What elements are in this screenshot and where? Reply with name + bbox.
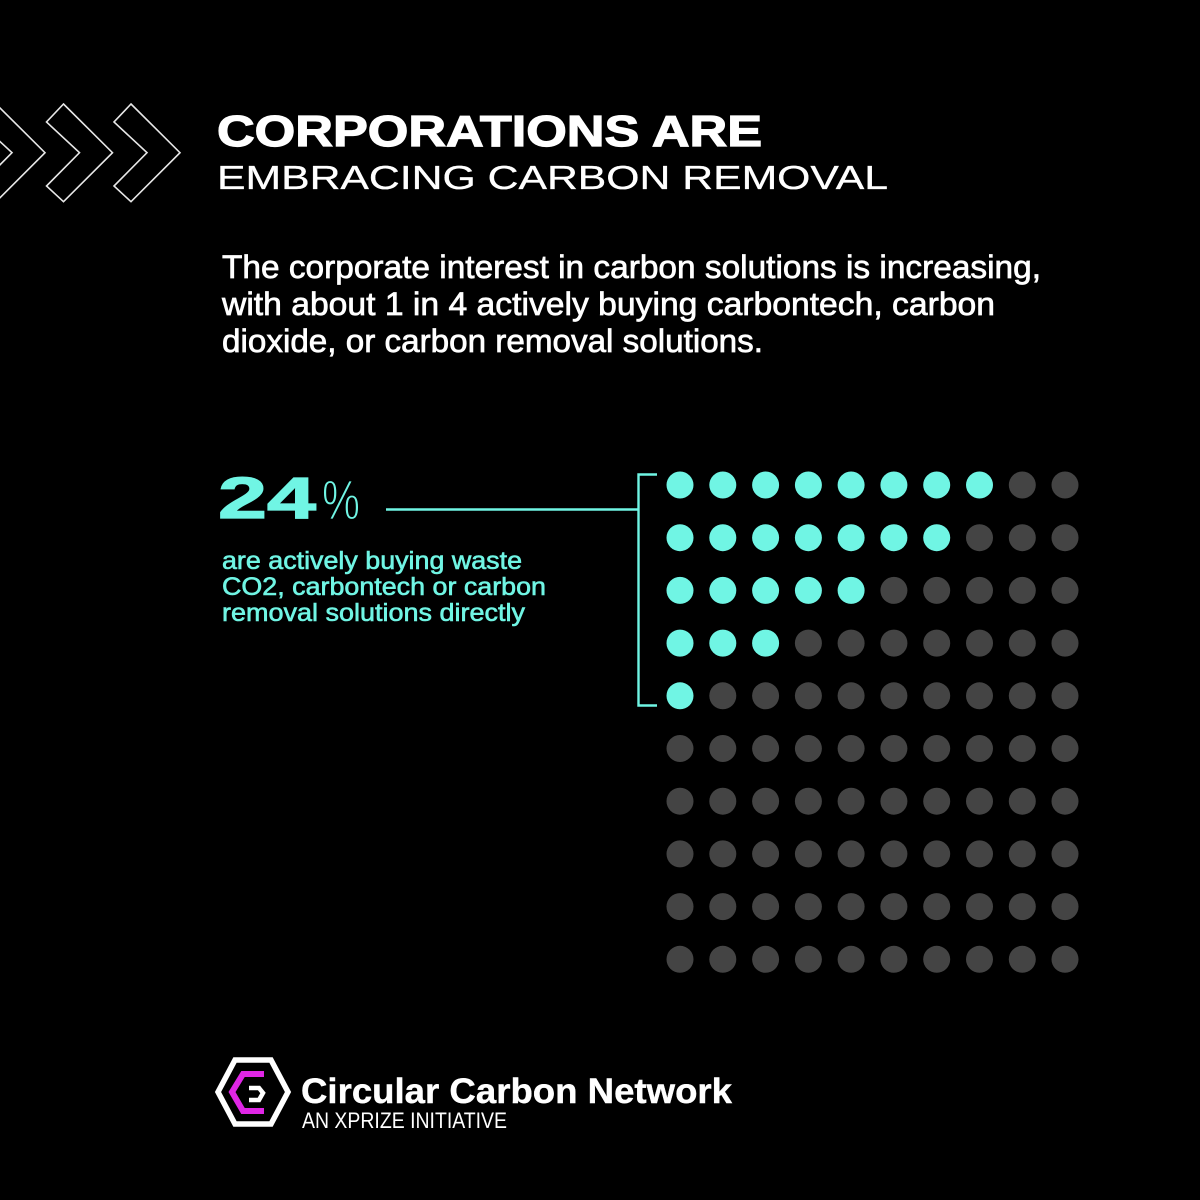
icon: Circular Carbon Network logo xyxy=(218,1060,288,1124)
title: EMBRACING CARBON REMOVAL xyxy=(217,159,888,196)
logo wordmark xyxy=(301,1072,733,1133)
logo wordmark: AN XPRIZE INITIATIVE xyxy=(302,1108,507,1133)
title: CORPORATIONS ARE xyxy=(217,107,762,156)
logo wordmark: Circular Carbon Network xyxy=(301,1072,733,1111)
stat description: CO2, carbontech or carbon xyxy=(222,573,546,601)
intro text xyxy=(221,249,1041,359)
stat description: removal solutions directly xyxy=(222,599,526,627)
statistic: 24% xyxy=(218,466,360,531)
icon: chevron arrows xyxy=(0,104,180,202)
intro text: with about 1 in 4 actively buying carbontech, carbon xyxy=(221,286,995,322)
statistic: 24%: 24 xyxy=(218,466,316,531)
intro text: dioxide, or carbon removal solutions. xyxy=(222,323,763,359)
title xyxy=(217,107,888,196)
statistic: 24%: % xyxy=(322,468,360,531)
intro text: The corporate interest in carbon solutions is increasing, xyxy=(222,249,1041,285)
stat description xyxy=(222,547,546,627)
connector bracket xyxy=(386,474,657,706)
dot matrix: 24 of 100 xyxy=(666,472,1078,973)
stat description: are actively buying waste xyxy=(222,547,522,575)
